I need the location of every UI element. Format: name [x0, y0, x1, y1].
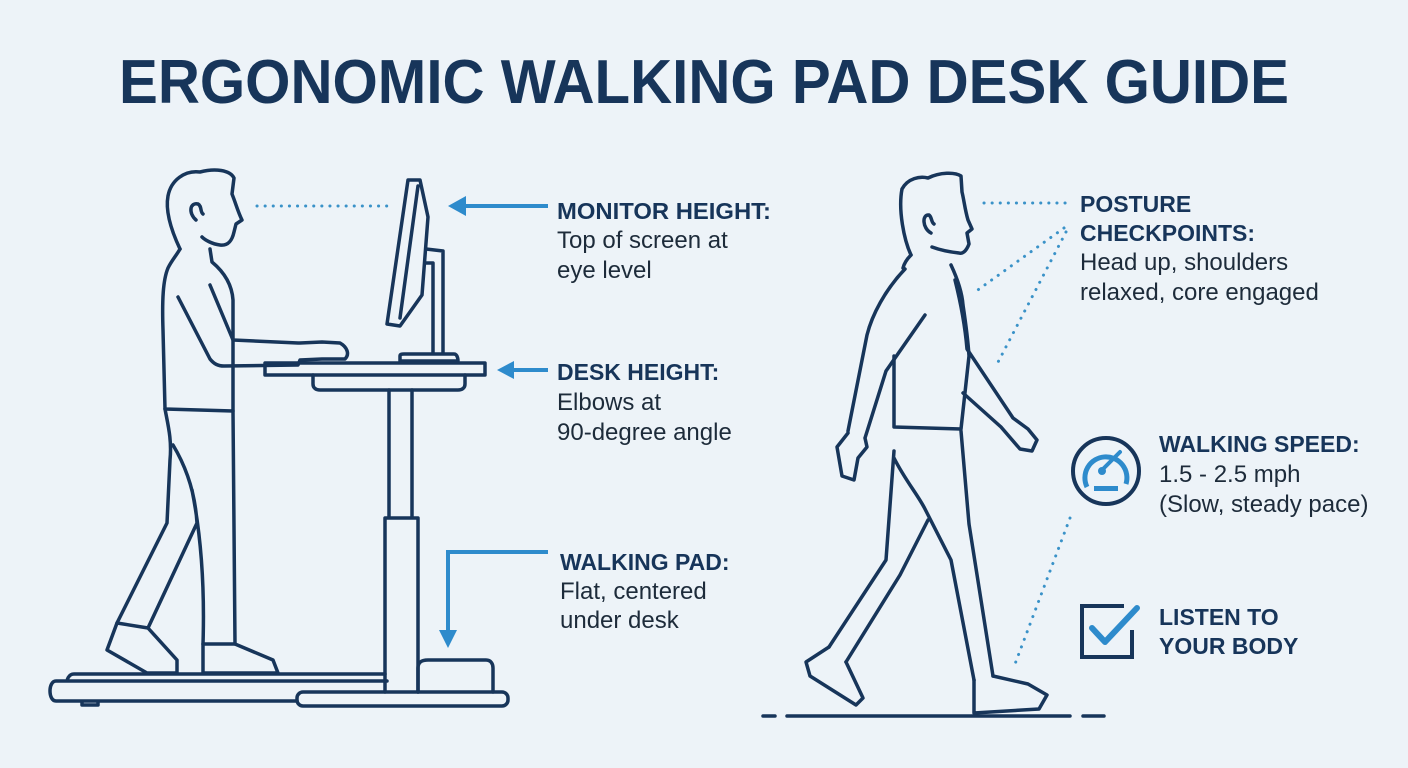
label: listen to your body [1159, 604, 1298, 659]
person legs [117, 409, 235, 644]
arrow: desk [497, 361, 548, 379]
person head [167, 170, 242, 249]
label: walking speed [1159, 431, 1368, 518]
label: walking pad: under desk [560, 607, 680, 634]
person torso [163, 249, 233, 411]
label: walking pad: WALKING PAD: [560, 549, 730, 575]
label: walking pad: Flat, centered [560, 578, 707, 605]
walker legs [829, 431, 993, 680]
label: listen to your body: YOUR BODY [1159, 633, 1298, 659]
label: monitor height: Top of screen at [557, 227, 728, 254]
label: walking speed: (Slow, steady pace) [1159, 491, 1368, 518]
label: posture checkpoints [1080, 191, 1319, 306]
label: monitor height: eye level [557, 257, 652, 284]
arrow: walking pad [439, 552, 548, 648]
desk top [265, 363, 485, 375]
title: ERGONOMIC WALKING PAD DESK GUIDE [119, 48, 1289, 117]
monitor [387, 180, 428, 326]
walker torso [894, 255, 969, 429]
label: desk height [557, 359, 732, 446]
walker back arm [837, 269, 925, 480]
walker feet [806, 647, 863, 705]
desk base and pad block [297, 692, 508, 706]
label: walking speed: WALKING SPEED: [1159, 431, 1360, 457]
label: posture checkpoints: Head up, shoulders [1080, 249, 1288, 276]
label: monitor height: MONITOR HEIGHT: [557, 198, 771, 224]
label: desk height: Elbows at [557, 389, 661, 416]
label: posture checkpoints: POSTURE [1080, 191, 1191, 217]
ground [763, 714, 1104, 718]
person feet [107, 623, 177, 673]
label: walking speed: 1.5 - 2.5 mph [1159, 461, 1300, 488]
arrow: monitor [448, 196, 548, 216]
illustration: walking person [763, 173, 1104, 716]
walking pad treadmill [50, 674, 387, 705]
label: listen to your body: LISTEN TO [1159, 604, 1279, 630]
label: posture checkpoints: CHECKPOINTS: [1080, 220, 1255, 246]
desk column [385, 390, 418, 692]
dotted line: eye level [257, 204, 388, 208]
label: posture checkpoints: relaxed, core engaged [1080, 279, 1319, 306]
person arm [178, 285, 347, 366]
label: monitor height [557, 198, 771, 284]
walker front arm [955, 280, 1037, 451]
dotted lines: posture [975, 203, 1070, 664]
label: desk height: 90-degree angle [557, 419, 732, 446]
walker head [901, 173, 972, 255]
icon: checkbox [1082, 606, 1137, 657]
icon: speedometer [1073, 438, 1139, 504]
illustration: standing person at desk [50, 170, 508, 706]
label: desk height: DESK HEIGHT: [557, 359, 719, 385]
label: walking pad [560, 549, 730, 634]
